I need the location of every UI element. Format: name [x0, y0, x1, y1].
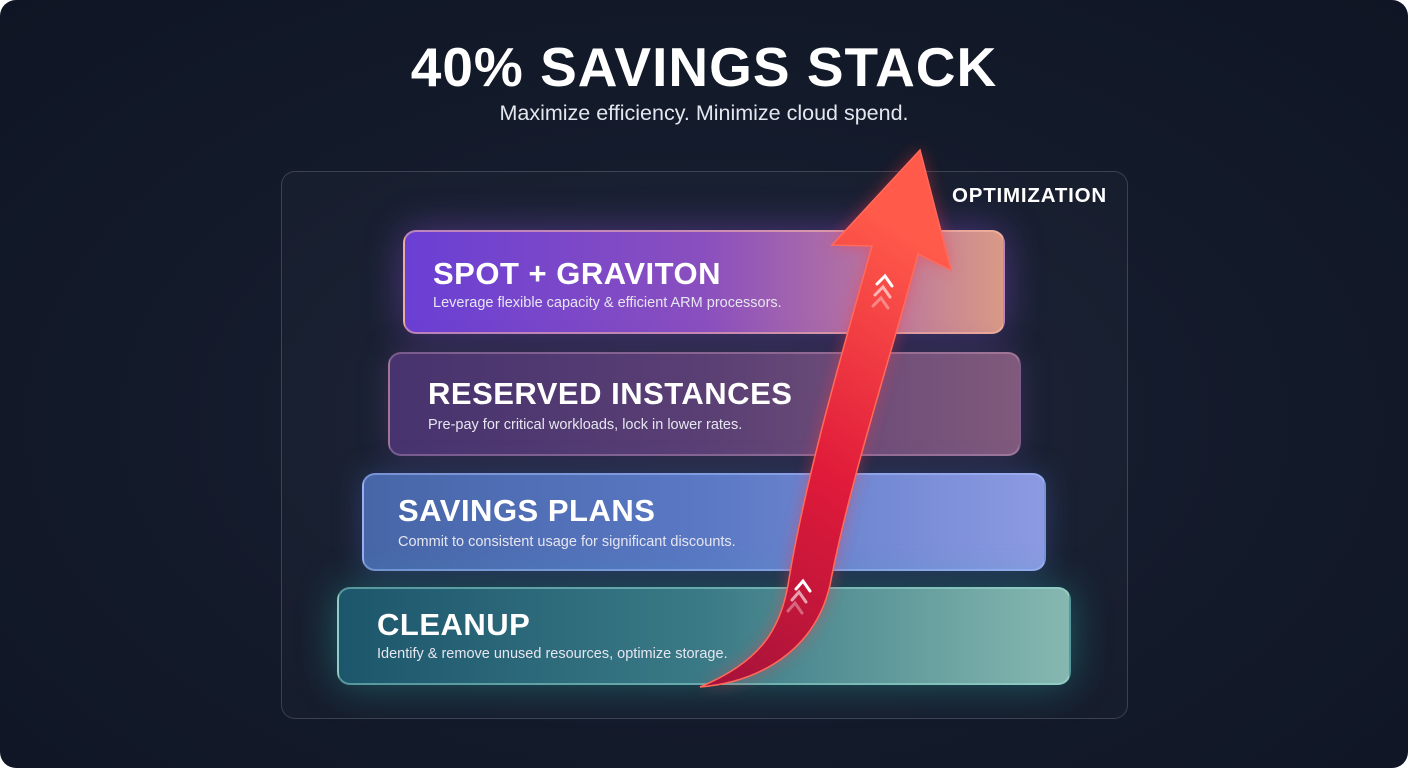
layer: savings plans [362, 473, 1046, 571]
layer: reserved instances: Pre-pay for critical workloads, lock in lower rates. [428, 417, 742, 433]
layer: cleanup [337, 587, 1071, 685]
layer: spot + graviton [403, 230, 1005, 334]
layer: spot + graviton: SPOT + GRAVITON [433, 256, 721, 291]
layer: cleanup: CLEANUP [377, 607, 530, 642]
layer: reserved instances: RESERVED INSTANCES [428, 376, 792, 411]
panel: stack frame [281, 171, 1128, 719]
layer: reserved instances [388, 352, 1021, 456]
subtitle: Maximize efficiency. Minimize cloud spend. [499, 101, 909, 125]
icon: chevrons lower [788, 581, 810, 613]
layer: savings plans: SAVINGS PLANS [398, 493, 655, 528]
layer: savings plans: Commit to consistent usage for significant discounts. [398, 534, 736, 550]
title: 40% SAVINGS STACK [411, 36, 997, 98]
layer: cleanup: Identify & remove unused resources, optimize storage. [377, 646, 728, 662]
icon: chevrons upper [873, 276, 892, 308]
layer: spot + graviton: Leverage flexible capacity & efficient ARM processors. [433, 295, 782, 311]
label: optimization: OPTIMIZATION [952, 184, 1107, 207]
